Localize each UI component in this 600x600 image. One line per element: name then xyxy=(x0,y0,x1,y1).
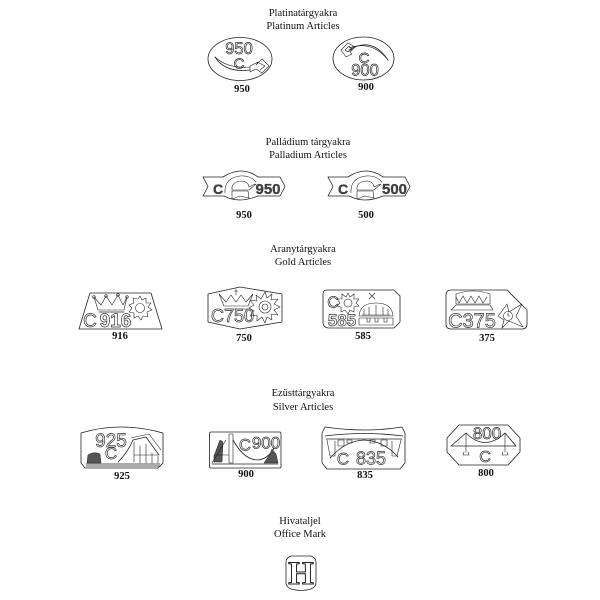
hallmark: platinum 900: 900 xyxy=(351,62,379,80)
hallmark: gold 750 xyxy=(208,287,282,329)
hallmark: palladium 950: C xyxy=(213,181,223,197)
hallmark: palladium 950: 950 xyxy=(255,181,281,198)
label: 900: 900 xyxy=(238,469,254,480)
hallmark: gold 585: 585 xyxy=(328,311,356,330)
section heading: office mark: Hivataljel xyxy=(279,516,321,527)
hallmark: gold 585: C xyxy=(327,294,339,312)
section heading: office mark xyxy=(274,516,327,540)
hallmark: office mark H: H xyxy=(288,556,314,592)
section heading: platinum xyxy=(266,8,340,32)
label: 500: 500 xyxy=(358,210,374,221)
hallmark: silver 835 xyxy=(322,427,405,469)
hallmark: platinum 900 xyxy=(333,37,394,80)
label: 750: 750 xyxy=(236,333,252,344)
hallmark: palladium 500: 500 xyxy=(382,181,407,198)
hallmark: silver 900 xyxy=(210,432,281,468)
hallmark: silver 835: 835 xyxy=(356,448,386,468)
section heading: platinum: Platinum Articles xyxy=(266,21,340,32)
hallmark: silver 925: 925 xyxy=(95,431,127,452)
label: 950: 950 xyxy=(234,84,250,95)
section heading: palladium: Palladium Articles xyxy=(269,150,347,161)
section heading: silver: Ezüsttárgyakra xyxy=(272,388,335,399)
hallmark: silver 925 xyxy=(81,427,163,468)
label: 916: 916 xyxy=(112,331,128,342)
hallmark: gold 916: C xyxy=(83,311,97,332)
hallmark: gold 916: 916 xyxy=(100,311,131,332)
section heading: palladium xyxy=(266,137,351,161)
hallmark: silver 900: C xyxy=(239,436,251,454)
label: 950: 950 xyxy=(236,210,252,221)
section heading: gold: Aranytárgyakra xyxy=(270,244,336,255)
hallmark: palladium 950 xyxy=(203,171,285,200)
hallmark: gold 375 xyxy=(446,290,527,332)
label: 800: 800 xyxy=(478,468,494,479)
label: 375: 375 xyxy=(479,333,495,344)
section heading: gold: Gold Articles xyxy=(275,257,331,268)
hallmark: silver 900: 900 xyxy=(252,434,280,452)
hallmark: platinum 900: C xyxy=(359,50,370,67)
label: 835: 835 xyxy=(357,470,373,481)
hallmark: gold 585 xyxy=(323,290,400,330)
section heading: gold xyxy=(270,244,336,268)
hallmark: gold 375: C375 xyxy=(448,310,496,332)
hallmark: silver 800 xyxy=(447,424,520,466)
section heading: silver xyxy=(272,388,335,413)
hallmark: gold 916 xyxy=(79,293,162,332)
hallmark: platinum 950: 950 xyxy=(225,40,253,58)
label: 585: 585 xyxy=(355,331,371,342)
section heading: office mark: Office Mark xyxy=(274,529,327,540)
hallmark: gold 750: C750 xyxy=(211,306,254,326)
section heading: platinum: Platinatárgyakra xyxy=(269,8,338,19)
section heading: silver: Silver Articles xyxy=(273,402,333,413)
hallmark: platinum 950: C xyxy=(234,56,245,72)
label: 925: 925 xyxy=(114,471,130,482)
hallmark: silver 800: C xyxy=(479,449,491,466)
hallmark: silver 800: 800 xyxy=(473,424,501,443)
hallmark: palladium 500 xyxy=(328,171,410,200)
hallmark: platinum 950 xyxy=(208,38,272,80)
hallmark: silver 925: C xyxy=(105,444,117,463)
hallmark: palladium 500: C xyxy=(338,181,348,197)
hallmark: silver 835: C xyxy=(337,450,349,468)
label: 900: 900 xyxy=(358,82,374,93)
section heading: palladium: Palládium tárgyakra xyxy=(266,137,351,148)
